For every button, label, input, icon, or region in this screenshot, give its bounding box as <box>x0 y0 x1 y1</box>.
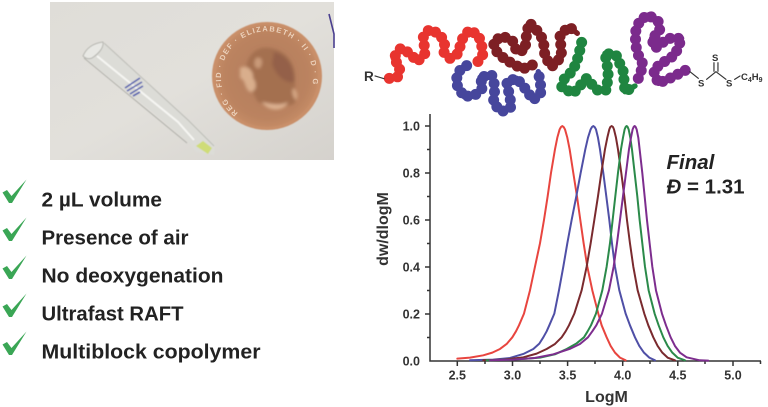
bead chain: blue block <box>456 66 542 112</box>
y axis tick labels: 0.4 <box>403 260 420 274</box>
check item: 2 µL volume <box>2 180 162 212</box>
bead chain: brown block <box>493 23 577 69</box>
y axis tick labels: 0.6 <box>403 214 420 228</box>
y axis title: dw/dlogM <box>375 192 392 266</box>
check item: No deoxygenation: No deoxygenation <box>42 266 224 288</box>
chemical bonds <box>375 63 740 79</box>
curve: purple block <box>490 126 708 361</box>
butyl group label: 4 <box>748 77 752 84</box>
photo: vial next to a coin <box>50 2 335 160</box>
sulfur label: thione: S <box>712 53 718 64</box>
line chart: molecular weight distributions <box>375 114 761 406</box>
y axis tick labels <box>403 120 420 368</box>
bead chain: red block <box>389 29 483 78</box>
check item: 2 µL volume: 2 µL volume <box>42 190 162 212</box>
check item: Ultrafast RAFT: Ultrafast RAFT <box>42 304 184 326</box>
y axis tick labels: 0.2 <box>403 308 420 322</box>
x axis tick labels: 2.5 <box>449 368 466 382</box>
bead chain: purple block <box>635 15 686 83</box>
curve: green block <box>487 126 685 360</box>
annotation: Final dispersity <box>666 151 745 198</box>
butyl group label: H <box>752 72 759 83</box>
multiblock polymer chain diagram <box>364 15 763 112</box>
x axis tick labels: 4.0 <box>614 368 631 382</box>
axes <box>425 114 761 366</box>
annotation: Final dispersity: Đ = 1.31 <box>666 176 745 198</box>
butyl group label: C <box>741 72 748 83</box>
curve: blue block <box>470 126 655 360</box>
check item: Multiblock copolymer <box>2 332 261 364</box>
bead chain: green block <box>562 42 635 93</box>
check item: Presence of air: Presence of air <box>42 228 189 250</box>
y axis tick labels: 1.0 <box>403 120 420 134</box>
x axis tick labels <box>449 368 742 382</box>
y axis tick labels: 0.0 <box>403 354 420 368</box>
check item: Ultrafast RAFT <box>2 294 184 326</box>
icon: glass vial <box>83 42 215 155</box>
curve: red block <box>457 126 626 360</box>
curves <box>457 126 708 361</box>
check item: Presence of air <box>2 218 189 250</box>
check item: No deoxygenation <box>2 256 224 288</box>
sulfur label: right: S <box>726 78 732 90</box>
x axis tick labels: 5.0 <box>724 368 742 382</box>
curve: brown block <box>483 126 675 360</box>
blue pen mark <box>329 14 334 48</box>
checklist <box>2 180 261 364</box>
check item: Multiblock copolymer: Multiblock copolymer <box>42 342 261 364</box>
sulfur label: S <box>698 78 704 90</box>
y axis tick labels: 0.8 <box>403 166 420 180</box>
butyl group label: 9 <box>759 77 763 84</box>
icon: coin: REG · FID · DEF · ELIZABETH · II · D · G <box>216 26 318 116</box>
x axis tick labels: 3.0 <box>504 368 521 382</box>
x axis tick labels: 4.5 <box>669 368 687 382</box>
end group label: R: R <box>364 69 374 84</box>
x axis title: LogM <box>585 389 628 406</box>
x axis tick labels: 3.5 <box>559 368 576 382</box>
annotation: Final dispersity: Final <box>666 151 716 174</box>
